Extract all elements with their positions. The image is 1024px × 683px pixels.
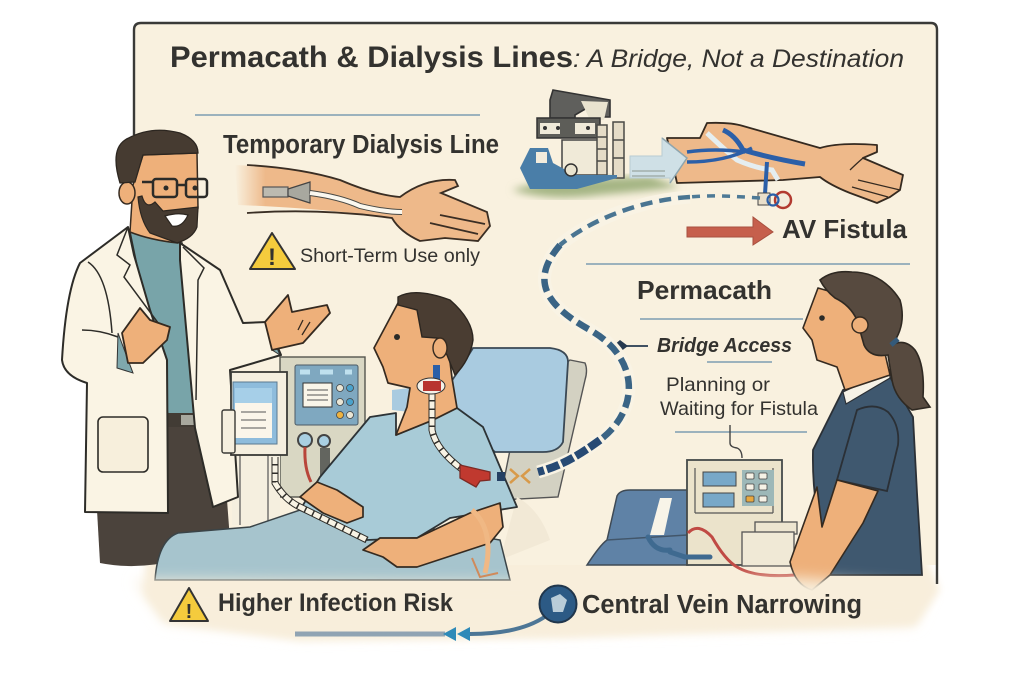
figure: doctor (62, 130, 330, 566)
figure: nurse (790, 272, 930, 590)
icon: warning triangle infection risk (170, 588, 208, 623)
title: Permacath & Dialysis Lines (170, 41, 573, 74)
icon: warning triangle infection risk: ! (186, 601, 192, 623)
text: planning or waiting: Planning or (666, 374, 771, 396)
bottom fade band (135, 578, 930, 636)
title (170, 41, 904, 74)
icon: left dialysis machine background (232, 357, 365, 525)
divider lines (195, 115, 910, 432)
title: : A Bridge, Not a Destination (573, 45, 904, 73)
arrow: bridge access pointer (613, 340, 648, 352)
text: bridge access: Bridge Access (657, 335, 792, 357)
arrow: curved orange arm arrow (472, 510, 498, 577)
panel: cream background (134, 23, 940, 640)
heading: permacath: Permacath (637, 275, 772, 305)
icon: vein narrowing connector (295, 586, 576, 641)
text: planning or waiting: Waiting for Fistula (660, 398, 818, 420)
text: higher infection risk: Higher Infection Risk (218, 589, 453, 617)
icon: fistula arm (667, 123, 903, 208)
heading: temporary dialysis line: Temporary Dialysis Line (223, 131, 499, 159)
arrow: dashed bridge path (538, 196, 760, 472)
icon: arrow to arm (630, 138, 687, 183)
arrow: av fistula (687, 217, 773, 245)
text: short-term use only: Short-Term Use only (300, 245, 480, 267)
icon: tablet on stand (222, 372, 287, 455)
text: central vein narrowing: Central Vein Narrowing (582, 591, 862, 619)
icon: right dialysis machine (587, 425, 797, 576)
icon: warning triangle short-term: ! (268, 244, 276, 271)
icon: warning triangle short-term (250, 233, 295, 271)
text: planning or waiting (660, 374, 818, 420)
icon: pillow and bed (392, 348, 586, 560)
icon: temporary line arm (235, 165, 490, 241)
icon: fistula machine (512, 90, 680, 198)
figure: patient (155, 293, 530, 580)
heading: av fistula: AV Fistula (782, 214, 908, 244)
